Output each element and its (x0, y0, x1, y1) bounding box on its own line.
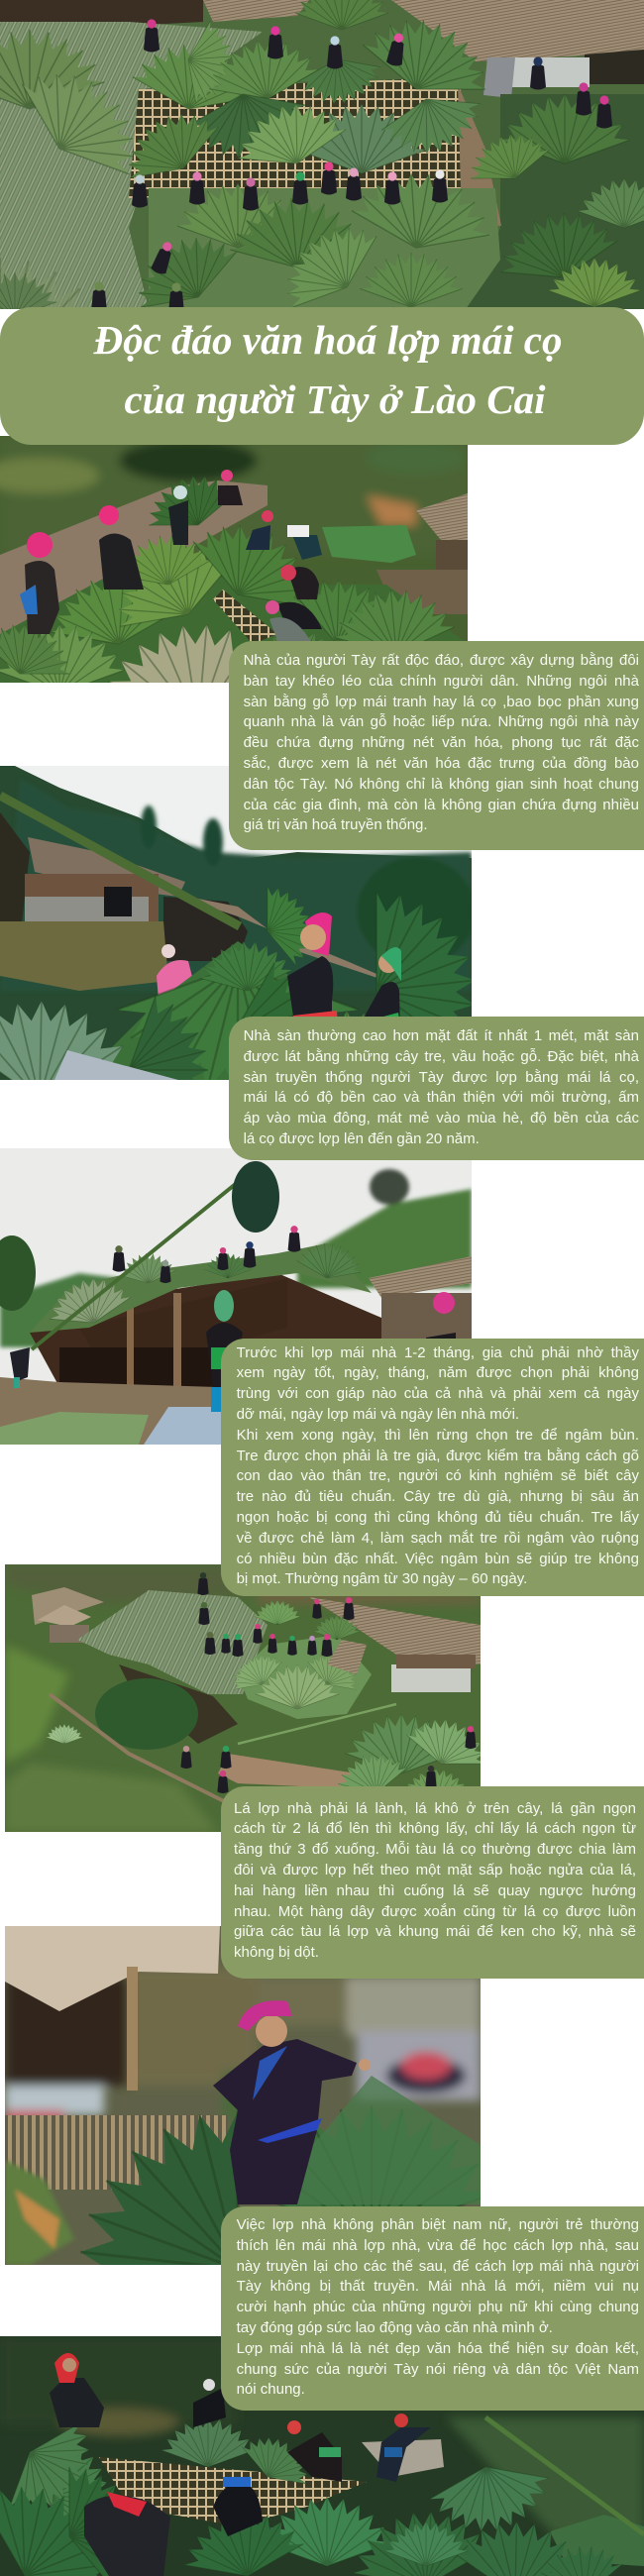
text panel 1: the Tày house: Nhà của người Tày rất độc đáo, được xây dựng bằng đôi (244, 652, 639, 669)
text panel 5: community and tradition: Việc lợp nhà không phân biệt nam nữ, người trẻ thường (237, 2216, 639, 2233)
text panel 2: stilt house and palm roofs: sàn truyền thống người Tày được lợp bằng mái lá cọ, (244, 1069, 639, 1086)
pale finished roof (77, 1590, 268, 1694)
text panel 3: choosing the date and bamboo: có nhiều bùn đặc nhất. Việc ngâm bùn sẽ giúp tre không (237, 1551, 639, 1567)
wooden post (127, 1967, 138, 2091)
woman with pink scarf (287, 912, 340, 1080)
hill on the right (0, 1169, 472, 1347)
right-hand ground (466, 94, 644, 309)
thatch eaves (5, 1926, 220, 2011)
text panel 5: community and tradition: Lợp mái nhà lá là nét đẹp văn hóa thể hiện sự đoàn kết, (237, 2340, 639, 2357)
text panel 3: choosing the date and bamboo: Trước khi lợp mái nhà 1-2 tháng, gia chủ phải nhờ thầy (237, 1344, 639, 1361)
photo: women laying palm leaves on a sloped roof (0, 436, 468, 683)
bamboo pole (0, 796, 240, 926)
text panel 3: choosing the date and bamboo: trùng với con giáp nào của cả nhà và phải xem cả ngày (237, 1385, 639, 1402)
rice pond (322, 525, 416, 563)
bamboo pole (485, 2417, 644, 2534)
blurred foreground fronds (5, 2160, 74, 2265)
fallen leaves (0, 1412, 149, 1445)
text panel 3: choosing the date and bamboo: dỡ mái, ngày lợp mái và ngày lên nhà mới. (237, 1406, 519, 1423)
photo: women laying fronds over a bamboo lattice (0, 2336, 644, 2576)
text panel 5: community and tradition (221, 2206, 644, 2411)
text panel 3: choosing the date and bamboo: ngọn hoặc bị cong thì cũng không đủ tiêu chuẩn. Tre lấy (237, 1509, 639, 1526)
big palm fronds (0, 869, 501, 1144)
fronds on the right (46, 1707, 495, 1806)
thatched roofs along the top (203, 0, 644, 98)
text panel 2: stilt house and palm roofs: Nhà sàn thường cao hơn mặt đất ít nhất 1 mét, mặt sàn (244, 1027, 639, 1044)
bamboo lattice (99, 2457, 367, 2526)
large bush (95, 1678, 198, 1750)
palm fronds (0, 0, 644, 376)
photo: raising palm bundles on a pole to a stilt house (0, 1148, 472, 1445)
woman with green scarf (357, 947, 401, 1080)
dark forest and right-hand field (0, 2336, 644, 2536)
blurred background (5, 1967, 481, 2150)
text panel 4: selecting and laying the leaves: cách từ 2 lá đổ lên thì không lấy, chỉ lấy lá cách ngọn từ (234, 1820, 636, 1837)
dark ground under the house (119, 1664, 238, 1744)
text panel 4: selecting and laying the leaves: nhau. Một hàng dây được xoắn cũng từ lá cọ được luồn (234, 1903, 636, 1920)
pole with frond bundle (32, 1161, 279, 1349)
palm frond mass (0, 463, 468, 731)
text panel 3: choosing the date and bamboo: Khi xem xong ngày, thì lên rừng chọn tre để ngâm bùn. (237, 1427, 639, 1444)
text panel 1: the Tày house: giá trị văn hoá truyền thống. (244, 816, 428, 833)
large fan frond (251, 2076, 492, 2239)
text panel 1: the Tày house: của các gia đình, mà còn là không gian chứa đựng nhiều (244, 797, 639, 813)
bamboo fence (5, 2115, 228, 2190)
text panel 5: community and tradition: chung sức của người Tày nói riêng và dân tộc Việt Nam (237, 2361, 639, 2378)
text panel 2: stilt house and palm roofs: được lát bằng những cây tre, vầu hoặc gỗ. Đặc biệt, nhà (244, 1048, 639, 1065)
title banner: của người Tày ở Lào Cai (124, 376, 546, 422)
felled log (362, 2439, 444, 2477)
stilt house (30, 1273, 381, 1397)
ground (0, 1377, 218, 1445)
text panel 1: the Tày house: dân tộc Tày. Nó không chỉ là không gian sinh hoạt chung (244, 776, 639, 793)
ground right (376, 570, 468, 614)
pale finished roof on the left (0, 22, 263, 309)
photo: aerial view of the house being roofed (5, 1564, 481, 1832)
text panel 5: community and tradition: nói chung. (237, 2381, 305, 2398)
text panel 4: selecting and laying the leaves: giữa các tàu lá lợp và khung mái để ken cho kỹ, nhà sẽ (234, 1923, 636, 1940)
text panel 5: community and tradition: cười hạnh phúc của những người phụ nữ khi cùng chung (237, 2299, 639, 2315)
wooden house (0, 812, 416, 991)
lower green frond (38, 2075, 288, 2409)
text panel 4: selecting and laying the leaves: không bị dột. (234, 1944, 319, 1961)
hillside texture (5, 1564, 481, 1832)
text panel 3: choosing the date and bamboo: bị mọt. Thường ngâm từ 30 ngày – 60 ngày. (237, 1570, 527, 1587)
forested hillside (0, 778, 476, 991)
pole (238, 1704, 396, 1744)
text panel 1: the Tày house: quanh nhà là ván gỗ hoặc liếp nứa. Những ngôi nhà này (244, 713, 639, 730)
workers (180, 1572, 477, 1793)
text panel 5: community and tradition: tay đóng góp sức lao động vào căn nhà mình ở. (237, 2319, 553, 2336)
new palm roof (224, 1600, 372, 1719)
metal sheet (144, 1407, 223, 1445)
text panel 4: selecting and laying the leaves: tầng thứ 3 đổ xuống. Mỗi tàu lá cọ thường được chia làm (234, 1841, 636, 1858)
pond (550, 2515, 644, 2566)
text panel 4: selecting and laying the leaves: đôi và được lợp hết theo một mặt sấp hoặc ngửa của lá, (234, 1862, 636, 1878)
pale sky (15, 766, 472, 862)
palm covered roof (30, 1238, 372, 1334)
rooftop workers (91, 19, 612, 316)
text panel 5: community and tradition: Tày không bị thất truyền. Mái nhà lá mới, niềm vui nụ (237, 2278, 639, 2295)
text panel 2: stilt house and palm roofs (229, 1017, 644, 1160)
title banner: Độc đáo văn hoá lợp mái cọ (93, 317, 562, 363)
text panel 5: community and tradition: này truyền lại cho các thế sau, để cách lợp mái nhà người (237, 2258, 639, 2275)
thatched hut (416, 493, 468, 585)
stone wall (0, 921, 168, 991)
text panel 4: selecting and laying the leaves (221, 1786, 644, 1979)
photo: women carrying palm fronds past a wooden house (0, 766, 472, 1080)
text panel 1: the Tày house: bàn tay khéo léo của chính người dân. Những ngôi nhà (244, 673, 639, 690)
hillside and dark shrubs (0, 436, 468, 555)
tree on the left (0, 1235, 36, 1311)
text panel 1: the Tày house: đều chứa đựng những nét văn hóa, phong tục rất đặc (244, 734, 639, 751)
thatch roof on the right (309, 1597, 481, 1664)
text panel 3: choosing the date and bamboo: Tre được chọn phải là tre già, được kiểm tra bằng cách gõ (237, 1448, 639, 1464)
text panel 1: the Tày house: sàn bằng gỗ lợp mái tranh hay lá cọ ,bao bọc phần xung (244, 694, 639, 710)
text panel 5: community and tradition: thích lên mái nhà lợp nhà, vừa để học cách lợp nhà, sau (237, 2237, 639, 2254)
white wall (391, 1655, 476, 1692)
title banner (0, 307, 644, 445)
text panel 4: selecting and laying the leaves: hai hàng liền nhau thì cuống lá sẽ quay ngược hướng (234, 1882, 636, 1899)
old thatch roof (0, 481, 268, 634)
brown thatch edge (458, 84, 501, 226)
text panel 3: choosing the date and bamboo: tre nào đủ tiêu chuẩn. Cây tre dù già, nhưng bị sâu ăn (237, 1488, 639, 1505)
photo: older woman carrying a palm frond (5, 1926, 481, 2265)
bare earth yard (218, 1754, 357, 1788)
workers (50, 2353, 431, 2576)
photo: aerial view of villagers laying palm leaves on a roof (0, 0, 644, 309)
text panel 2: stilt house and palm roofs: mái lá có độ bền cao và thân thiện với môi trường, ấm (244, 1089, 639, 1106)
thatch house on the right (369, 1256, 472, 1352)
text panel 3: choosing the date and bamboo: con dao vào thân tre, người có kinh nghiệm sẽ biết cây (237, 1467, 639, 1484)
bamboo lattice frame (129, 77, 462, 198)
pink-clad woman (157, 944, 198, 1035)
text panel 3: choosing the date and bamboo: về được chẻ làm 4, làm sạch mắt tre rồi ngâm vào ruộng (237, 1530, 639, 1547)
woman (213, 2000, 371, 2204)
fronds (0, 2410, 628, 2576)
text panel 3: choosing the date and bamboo: xem ngày tốt, ngày, tháng, năm được chọn phải không (237, 1364, 639, 1381)
text panel 3: choosing the date and bamboo (221, 1339, 644, 1596)
text panel 1: the Tày house: sắc, được xem là nét văn hóa đặc trưng của đồng bào (244, 755, 639, 772)
women on the roof (20, 470, 322, 654)
small huts at top left (32, 1587, 104, 1643)
text panel 4: selecting and laying the leaves: Lá lợp nhà phải lá lành, lá khô ở trên cây, lá gần ngọn (234, 1800, 636, 1817)
text panel 2: stilt house and palm roofs: áp vào mùa đông, mát mẻ vào mùa hè, độ bền của các (244, 1110, 639, 1127)
onlookers and roof workers (10, 1226, 456, 1412)
text panel 2: stilt house and palm roofs: lá cọ được lợp lên đến gần 20 năm. (244, 1130, 480, 1147)
text panel 1: the Tày house (229, 641, 644, 850)
fence on the slope (50, 1694, 228, 1803)
metal sheet (54, 1050, 178, 1080)
